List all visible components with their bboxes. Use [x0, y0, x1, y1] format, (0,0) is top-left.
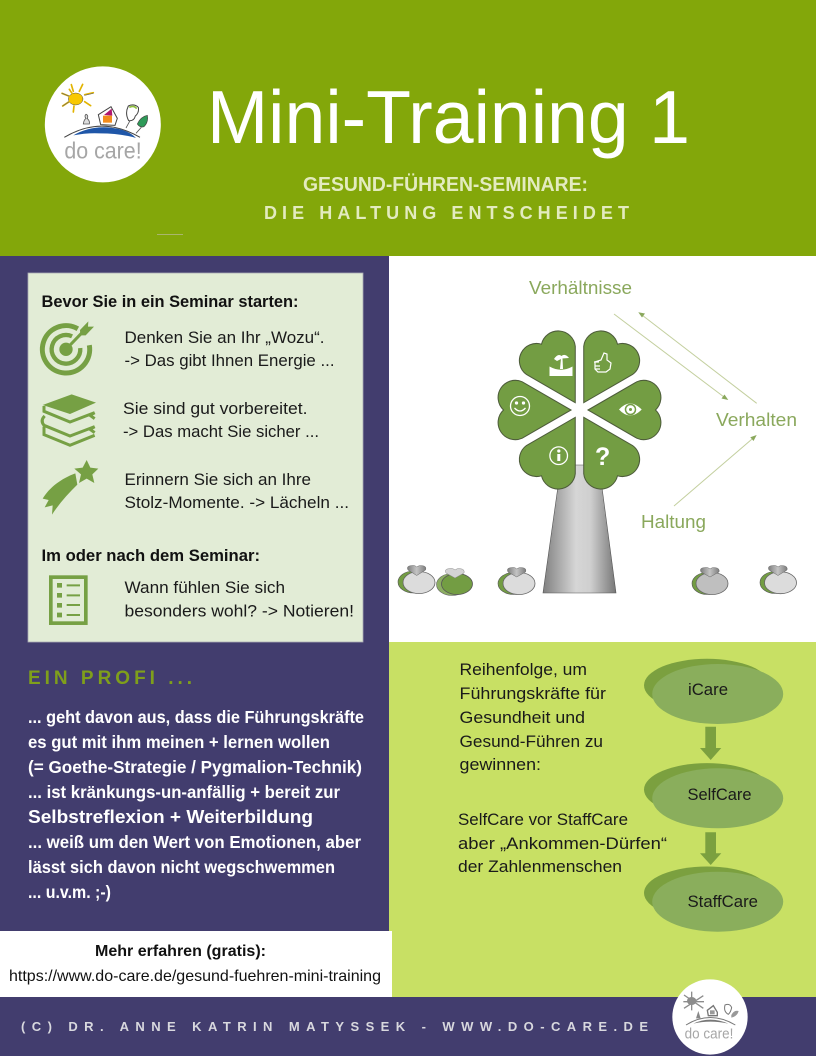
flow: SelfCare: SelfCare	[688, 785, 752, 804]
icon: thumbs up	[594, 353, 611, 372]
icon: landscape	[64, 105, 148, 138]
callout: mehr erfahren	[0, 931, 392, 997]
icon: info	[550, 447, 568, 465]
heading: ein profi: EIN PROFI ...	[28, 668, 192, 689]
illustration: tree	[498, 325, 661, 593]
icon: eye	[619, 404, 642, 416]
icon: palm island	[550, 355, 572, 376]
heading: before the seminar: Bevor Sie in ein Seminar starten:	[42, 292, 298, 311]
heading: during the seminar: Im oder nach dem Seminar:	[42, 546, 260, 565]
footer logo wordmark: do care!	[685, 1026, 733, 1042]
text block: profi list: lässt sich davon nicht wegschwemmen	[28, 857, 335, 877]
panel: tree illustration background	[389, 256, 816, 642]
leaf 3	[498, 568, 535, 594]
leaf 2	[436, 569, 472, 596]
icon: question mark: ?	[595, 443, 610, 471]
title: Mini-Training 1	[207, 75, 690, 159]
label: Verhalten: Verhalten	[716, 410, 797, 430]
arrow: Haltung to Verhalten	[674, 435, 757, 506]
tip 3 text	[124, 470, 349, 512]
tip 2 text: -> Das macht Sie sicher ...	[123, 422, 319, 441]
text block: profi list: ... geht davon aus, dass die Führungskräfte	[28, 707, 364, 727]
text block: Reihenfolge: Gesundheit und	[460, 708, 585, 727]
flow: StaffCare	[644, 866, 783, 932]
footer credit: (C) DR. ANNE KATRIN MATYSSEK - WWW.DO-CARE.DE	[21, 1019, 648, 1034]
icon: grey sun	[683, 992, 704, 1010]
panel: seminar tips	[28, 273, 363, 642]
icon: smiley	[510, 396, 530, 416]
icon: sun	[62, 84, 93, 112]
icon: shooting star	[43, 460, 98, 515]
flow: StaffCare: StaffCare	[688, 892, 758, 911]
text block: profi list: Selbstreflexion + Weiterbildung	[28, 807, 313, 827]
leaf 1	[398, 566, 435, 594]
text block: profi list	[28, 707, 364, 902]
text block: Reihenfolge: gewinnen:	[460, 755, 541, 774]
text block: Reihenfolge: Gesund-Führen zu	[460, 732, 603, 751]
icon: books	[42, 394, 96, 445]
tip 2 text	[123, 399, 319, 441]
tip 1 text: Denken Sie an Ihr „Wozu“.	[124, 328, 324, 347]
panel: left purple	[0, 256, 389, 997]
leaf 5	[760, 566, 796, 594]
label: Haltung: Haltung	[641, 512, 706, 532]
text block: SelfCare vor StaffCare: der Zahlenmenschen	[458, 857, 622, 876]
panel: light green	[389, 642, 816, 997]
arrow: iCare to SelfCare	[700, 727, 721, 760]
tip 4 text: besonders wohl? -> Notieren!	[124, 602, 354, 620]
tip 1 text	[124, 328, 334, 370]
text block: profi list: ... u.v.m. ;-)	[28, 882, 111, 902]
footer logo	[672, 979, 748, 1055]
tip 3 text: Stolz-Momente. -> Lächeln ...	[124, 493, 349, 512]
text block: profi list: ... weiß um den Wert von Emotionen, aber	[28, 832, 361, 852]
footer band	[0, 997, 816, 1056]
flow: iCare	[644, 659, 783, 724]
subtitle: GESUND-FÜHREN-SEMINARE:	[303, 173, 588, 196]
subtitle	[264, 173, 629, 223]
text block: Reihenfolge	[460, 660, 606, 774]
logo: do care	[45, 66, 161, 182]
label: Verhältnisse: Verhältnisse	[529, 278, 632, 298]
flow: SelfCare	[644, 763, 783, 828]
logo wordmark: do care!	[64, 137, 142, 163]
tree trunk	[543, 465, 616, 593]
text block: profi list: es gut mit ihm meinen + lernen wollen	[28, 732, 330, 752]
callout: mehr erfahren: https://www.do-care.de/gesund-fuehren-mini-training	[9, 968, 381, 985]
icon: grey landscape	[686, 1004, 739, 1025]
tip 3 text: Erinnern Sie sich an Ihre	[124, 470, 311, 489]
header band	[0, 0, 816, 256]
tip 1 text: -> Das gibt Ihnen Energie ...	[124, 351, 334, 370]
flow: iCare: iCare	[688, 680, 728, 699]
tip 2 text: Sie sind gut vorbereitet.	[123, 399, 308, 418]
text block: profi list: ... ist kränkungs-un-anfällig + bereit zur	[28, 782, 340, 802]
arrow: Verhalten to Verhältnisse	[638, 312, 757, 403]
text block: SelfCare vor StaffCare: SelfCare vor StaffCare	[458, 810, 628, 829]
fallen leaves	[398, 566, 796, 596]
tip 4 text: Wann fühlen Sie sich	[124, 578, 285, 597]
text block: SelfCare vor StaffCare: aber „Ankommen-Dürfen“	[458, 834, 667, 853]
icon: target	[42, 321, 94, 373]
subtitle: DIE HALTUNG ENTSCHEIDET	[264, 203, 629, 223]
text block: Reihenfolge: Reihenfolge, um	[460, 660, 587, 679]
text block: SelfCare vor StaffCare	[458, 810, 667, 876]
callout: mehr erfahren: Mehr erfahren (gratis):	[95, 943, 266, 960]
tree crown petals	[498, 325, 661, 495]
text block: profi list: (= Goethe-Strategie / Pygmalion-Technik)	[28, 757, 362, 777]
arrow: Verhältnisse to Verhalten	[614, 314, 728, 400]
arrow: SelfCare to StaffCare	[700, 832, 721, 865]
icon: checklist	[51, 577, 86, 623]
tip 4 text	[124, 578, 354, 620]
leaf 4	[692, 568, 728, 594]
text block: Reihenfolge: Führungskräfte für	[460, 684, 606, 703]
